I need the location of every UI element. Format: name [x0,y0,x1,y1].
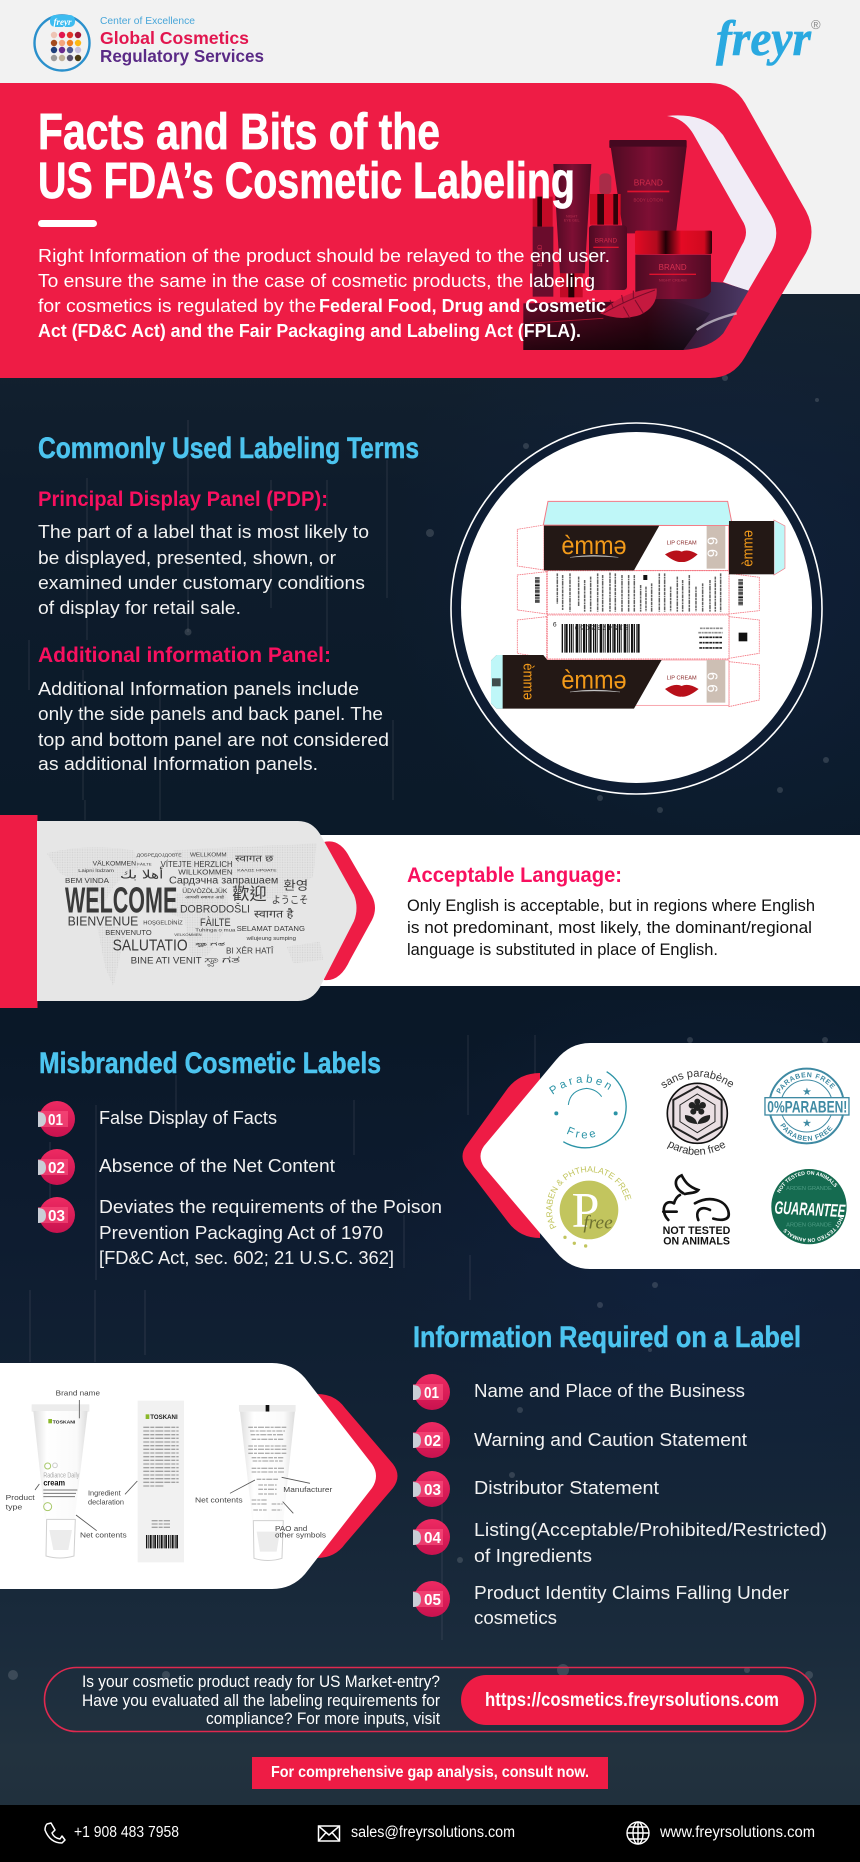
greetings: Laipni lūdzam [78,868,114,873]
slim tube: EYE GEL [564,219,579,223]
circle: unfolded lipstick carton: LIP CREAM [667,541,697,547]
barcode: 8 1 5 4 7 3 2 0 5 9 [575,623,628,630]
item 03: 03 [424,1482,441,1499]
seal: sans parabene: sans parabène [661,1070,734,1088]
button: consult now [252,1757,608,1789]
header logo: freyr: ® [811,17,821,32]
callout labels: PAO and [275,1524,307,1533]
text: Acceptable Language: Acceptable Language: [407,864,622,887]
item 02 [413,1422,747,1458]
term: Principal Display Panel: Principal Display Panel (PDP): [38,488,328,511]
item 01: False Display of Facts [99,1108,277,1128]
feather [600,288,657,318]
seal: Paraben Free: Free [566,1126,596,1138]
item 01 [413,1374,745,1410]
return address block [698,628,723,648]
item 01 [38,1101,277,1137]
seal: Paraben and Phthalate Free: PARABEN & PHTHALATE FREE [546,1166,632,1230]
seal: Paraben and Phthalate Free: P [572,1182,599,1238]
item 04: 04 [424,1530,441,1547]
greetings: ÜDVÖZÖLJÜK [182,887,228,895]
callout labels [6,1388,333,1539]
hero chevron swoosh [667,115,776,291]
dropper bottle: BRAND [595,238,617,245]
button: consult now: For comprehensive gap analysis, consult now. [271,1764,589,1781]
greetings: स्वागत छ [235,853,274,863]
hero title: Facts and Bits of the [38,103,440,160]
term: Additional information Panel: as additional Information panels. [38,754,318,774]
side barcodes [530,577,544,603]
header logo: Center of Excellence [34,15,264,70]
carton outline tabs [517,525,759,707]
jar: BRAND [659,263,687,272]
footer bar [0,1805,860,1862]
circle: unfolded lipstick carton: 9 9 [705,537,721,557]
seal: Guarantee: NOT TESTED ON ANIMALS [776,1170,838,1193]
term: Additional information Panel: only the side panels and back panel. The [38,704,383,724]
term: Principal Display Panel [38,488,369,618]
text: phone number: +1 908 483 7958 [74,1824,179,1841]
greetings: BENVENUTO [105,928,152,937]
text: Acceptable Language: language is substituted in place of English. [407,941,718,959]
red block: left of language panel [0,815,38,1008]
greetings: ಸ್ವಾಗತ [195,941,225,948]
front tube: TOSKANI [53,1419,76,1425]
header logo: Center of Excellence: Global Cosmetics [100,28,249,48]
circle: unfolded lipstick carton: èmmə [561,665,627,695]
callout labels: Brand name [56,1388,100,1397]
greetings: आपसी स्वागत आहे [185,895,225,900]
header logo: Center of Excellence: Center of Excellence [100,16,195,27]
hero intro paragraph [38,246,610,341]
greetings: SELAMAT DATANG [237,924,305,933]
chevron: language panel [324,841,375,980]
circle: unfolded lipstick carton: èmmə [741,530,757,567]
seal: Paraben and Phthalate Free: free [583,1212,613,1233]
seal: Paraben Free [549,1071,627,1148]
jar: NIGHT CREAM [659,278,687,283]
callout labels: Ingredient [88,1489,121,1498]
greetings: ಸ್ವಾಗತ [204,955,240,966]
item 04 [413,1519,827,1566]
icon: rabbit, not tested on animals: NOT TESTED [663,1225,730,1237]
heading: Misbranded Cosmetic Labels: Misbranded Cosmetic Labels [39,1047,381,1080]
item 01: 01 [424,1385,439,1402]
barcode [553,620,641,638]
callout labels: Manufacturer [283,1485,333,1494]
item 01: Name and Place of the Business [474,1381,745,1401]
item 02: Absence of the Net Content [99,1156,335,1176]
item 02 [38,1149,335,1185]
bottom panel [547,660,729,705]
heading: Information Required on a Label: Information Required on a Label [413,1321,801,1354]
item 04: Listing(Acceptable/Prohibited/Restricted) [474,1520,827,1540]
item 03 [38,1197,442,1268]
text: Acceptable Language: is not predominant, most likely, the dominant/regional [407,919,812,937]
dotted world map [47,843,323,987]
greetings: SALUTATIO [113,937,188,954]
text: website: www.freyrsolutions.com [659,1824,815,1841]
right side flap [774,520,785,575]
slim tube: NIGHT [566,214,578,218]
panel: white band for acceptable language [300,835,860,986]
list: information required on a label [413,1374,827,1628]
greetings: BEM VINDA [65,876,109,885]
header logo: freyr: freyr [716,10,812,66]
chevron: label diagram panel [317,1394,398,1558]
big tube: BODY LOTION [634,198,663,203]
item 04: of Ingredients [474,1546,592,1566]
term: Additional information Panel: Additional information Panel: [38,644,331,667]
greetings: स्वागत है [254,907,294,920]
item 03: Deviates the requirements of the Poison [99,1197,442,1217]
greetings: WELCOME [65,879,177,920]
carton [138,1401,184,1562]
greetings: ΚΑΛΩΣ ΗΡΘΑΤΕ [237,867,277,872]
front tube [32,1404,89,1558]
seal: Paraben Free: Paraben [549,1074,611,1094]
callout labels: type [6,1502,22,1511]
seal: Guarantee: ARDEN GRANDE [786,1186,832,1192]
callout labels: other symbols [275,1530,326,1539]
item 05: cosmetics [474,1608,557,1628]
hero intro paragraph: Act (FD&C Act) and the Fair Packaging and Labeling Act (FPLA). [38,321,581,341]
item 03: 03 [48,1208,65,1225]
jar [635,231,712,299]
call to action pill [44,1668,816,1732]
barcode: 9 [553,620,557,627]
term: Principal Display Panel: of display for retail sale. [38,598,241,618]
dropper bottle [589,173,627,290]
item 05 [413,1581,789,1628]
legal text columns [557,573,721,612]
term: Additional information Panel [38,644,389,774]
list: misbranded cosmetic labels [38,1101,442,1268]
text: Acceptable Language: Only English is acceptable, but in regions where English [407,897,815,915]
table surface [523,281,749,350]
greetings: BIENVENUE [68,913,138,928]
circle: unfolded lipstick carton: 9 9 [705,672,721,692]
hero intro paragraph: Right Information of the product should be relayed to the end user. [38,246,610,266]
greetings: أهلا بك [120,867,163,882]
seal: Guarantee: ARDEN GRANDE [786,1223,832,1229]
item 03 [413,1471,659,1507]
callout labels: Net contents [80,1530,127,1539]
item 03: Prevention Packaging Act of 1970 [99,1223,383,1243]
greetings: FÀILTE [200,916,231,929]
back tube [239,1405,296,1560]
icon: rabbit, not tested on animals: ON ANIMALS [663,1236,730,1248]
greetings: VÄLKOMMEN [93,861,136,868]
term: Additional information Panel: top and bottom panel are not considered [38,730,389,750]
text: email: sales@freyrsolutions.com [351,1824,515,1841]
greetings: VÍTEJTE HERZLICH [161,860,233,869]
hero intro paragraph: Federal Food, Drug and Cosmetic [319,296,606,316]
greetings: 환영 [283,876,308,893]
circle: unfolded lipstick carton [451,423,822,794]
top panel [544,526,728,570]
chevron: paraben panel [462,1073,540,1238]
greetings: BI XÊR HATÎ [226,945,274,955]
item 03: [FD&C Act, sec. 602; 21 U.S.C. 362] [99,1248,394,1268]
seal: 0% Paraben [764,1068,850,1144]
seal: sans parabene [661,1070,734,1156]
callout labels: Net contents [195,1495,243,1504]
seal: sans parabene: paraben free [666,1141,726,1156]
greetings: Tuhinga o mua [195,928,236,934]
greetings: 歡迎 [232,880,267,904]
greetings: WELLKOMM [190,853,227,859]
greetings: DOBRODOŠLI [180,903,250,916]
icon: envelope [318,1826,340,1841]
big tube [609,140,687,233]
item 02: 02 [424,1433,441,1450]
front tube: Radiance Daily [43,1470,80,1479]
greetings: VELKOMMEN [174,932,202,937]
callout labels: Product [6,1493,36,1502]
hero title: US FDA’s Cosmetic Labeling [38,152,575,209]
header logo: Center of Excellence: Regulatory Services [100,46,264,66]
hero product photo [523,140,749,350]
greetings: WILLKOMMEN [178,868,233,877]
greetings [65,853,308,966]
lipstick [533,197,553,297]
item 05: Product Identity Claims Falling Under [474,1583,789,1603]
call to action pill: https://cosmetics.freyrsolutions.com [485,1690,779,1711]
seal: 0% Paraben: PARABEN FREE [776,1072,836,1094]
item 01: 01 [48,1112,63,1129]
greetings: HOŞGELDİNİZ [143,920,183,927]
seal: 0% Paraben: PARABEN FREE [780,1122,833,1141]
title underline bar [38,220,97,227]
item 03: Distributor Statement [474,1478,659,1498]
seal: 0% Paraben: ★ [803,1118,812,1128]
callout labels: declaration [88,1497,124,1506]
panel: welcome word cloud [37,821,356,1001]
text: Acceptable Language [407,864,815,959]
panel: annotated label diagram [0,1363,376,1589]
circle: unfolded lipstick carton: èmmə [519,663,535,700]
panel: certification seals [480,1043,860,1269]
item 02: 02 [48,1160,65,1177]
term: Additional information Panel: Additional Information panels include [38,679,359,699]
term: Principal Display Panel: examined under customary conditions [38,573,365,593]
greetings: ようこそ [272,891,308,906]
front tube: cream [43,1478,65,1488]
hero intro paragraph: To ensure the same in the case of cosmetic products, the labeling [38,271,595,291]
top flap [543,501,732,526]
hero banner [0,83,812,378]
term: Principal Display Panel: The part of a label that is most likely to [38,522,369,542]
item 05: 05 [424,1592,441,1609]
big tube: BRAND [634,177,663,187]
greetings: wilujeung sumping [247,936,296,942]
carton: TOSKANI [150,1415,178,1421]
circle: unfolded lipstick carton: LIP CREAM [667,675,697,681]
slim tube [553,164,591,297]
greetings: Сардэчна запрашаем [169,875,278,886]
seal: 0% Paraben: ★ [803,1086,812,1096]
icon: globe [627,1822,649,1844]
header logo: Center of Excellence: freyr [54,17,72,27]
seal: Guarantee: NOT TESTED ON ANIMALS [784,1217,844,1242]
greetings: FÄILTE [137,863,152,867]
greetings: BINE ATI VENIT [131,955,202,965]
call to action pill: Have you evaluated all the labeling requirements for [82,1692,440,1710]
icon: rabbit, not tested on animals [663,1175,730,1248]
call to action pill: Is your cosmetic product ready for US Market-entry? [82,1673,440,1691]
lipstick: BRAND [537,244,544,267]
greetings: ДОБРЕДОЈДОВТЕ [137,853,182,859]
circle: unfolded lipstick carton: èmmə [561,530,627,560]
hero intro paragraph: for cosmetics is regulated by the [38,296,316,316]
leader lines [35,1400,310,1531]
call to action pill: compliance? For more inputs, visit [206,1710,440,1728]
seal: Guarantee [771,1169,847,1244]
icon: phone [45,1823,65,1843]
heading: Commonly Used Labeling Terms: Commonly Used Labeling Terms [38,432,419,465]
hero title [38,103,575,209]
term: Principal Display Panel: be displayed, presented, shown, or [38,548,336,568]
item 02: Warning and Caution Statement [474,1430,747,1450]
